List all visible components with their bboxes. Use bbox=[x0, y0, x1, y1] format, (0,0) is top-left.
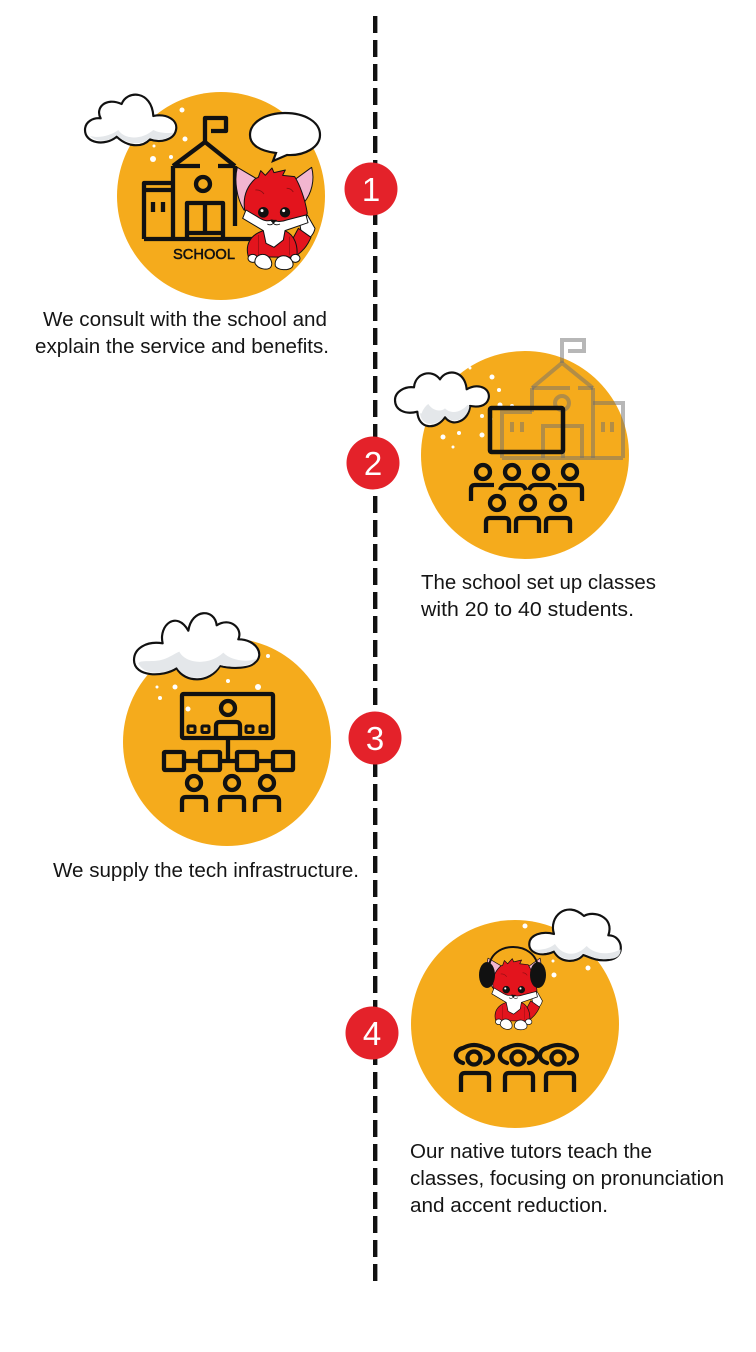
icon: classroom board bbox=[490, 408, 563, 452]
step 4 number badge bbox=[346, 1006, 398, 1060]
icon: network of nodes bbox=[164, 738, 293, 770]
step 2 caption bbox=[420, 572, 656, 621]
icon: fox with headphones bbox=[479, 947, 546, 1030]
step 3 panel bbox=[53, 613, 402, 882]
step 4 cloud bbox=[529, 910, 621, 961]
step 4 orange circle bbox=[411, 920, 619, 1128]
step 3 number badge bbox=[348, 712, 402, 764]
step 1 orange circle bbox=[117, 92, 325, 300]
step 4 caption: Our native tutors teach the bbox=[410, 1141, 652, 1163]
step 2 cloud bbox=[395, 373, 489, 426]
step 1 panel bbox=[35, 92, 398, 358]
step 2 number badge: 2 bbox=[364, 445, 382, 482]
step 2 number badge bbox=[346, 436, 400, 490]
icon: three students bbox=[182, 776, 279, 812]
icon: video screen with presenter bbox=[182, 694, 273, 738]
icon: fox mascot bbox=[236, 167, 315, 270]
step 4 caption: classes, focusing on pronunciation bbox=[410, 1168, 724, 1190]
step 2 panel bbox=[346, 340, 656, 621]
step 3 number badge: 3 bbox=[366, 720, 384, 757]
step 2 caption: with 20 to 40 students. bbox=[420, 599, 634, 621]
step 2 caption: The school set up classes bbox=[421, 572, 656, 594]
step 4 number badge: 4 bbox=[363, 1015, 381, 1052]
timeline dashed line bbox=[373, 16, 377, 1281]
step 4 caption bbox=[410, 1141, 724, 1217]
step 3 caption: We supply the tech infrastructure. bbox=[53, 860, 359, 882]
icon: faded school bbox=[502, 340, 623, 458]
step 1 sparkles bbox=[150, 108, 188, 162]
speech bubble bbox=[250, 113, 320, 161]
step 2 sparkles bbox=[440, 366, 514, 448]
step 1 caption bbox=[35, 309, 329, 358]
step 3 sparkles bbox=[156, 654, 270, 712]
step 1 number badge bbox=[344, 162, 398, 216]
step 4 panel bbox=[346, 910, 724, 1217]
step 1 caption: explain the service and benefits. bbox=[35, 336, 329, 358]
step 1 caption: We consult with the school and bbox=[43, 309, 327, 331]
icon: three tutors with headsets bbox=[456, 1045, 577, 1092]
step 1 number badge: 1 bbox=[362, 171, 380, 208]
icon: school building bbox=[144, 118, 256, 239]
school label: SCHOOL bbox=[173, 247, 235, 263]
step 3 cloud bbox=[134, 613, 259, 679]
step 4 sparkles bbox=[522, 924, 590, 978]
step 1 cloud bbox=[85, 95, 176, 145]
step 2 orange circle bbox=[421, 351, 629, 559]
icon: seven students bbox=[471, 465, 582, 533]
step 4 caption: and accent reduction. bbox=[410, 1195, 608, 1217]
step 3 orange circle bbox=[123, 638, 331, 846]
